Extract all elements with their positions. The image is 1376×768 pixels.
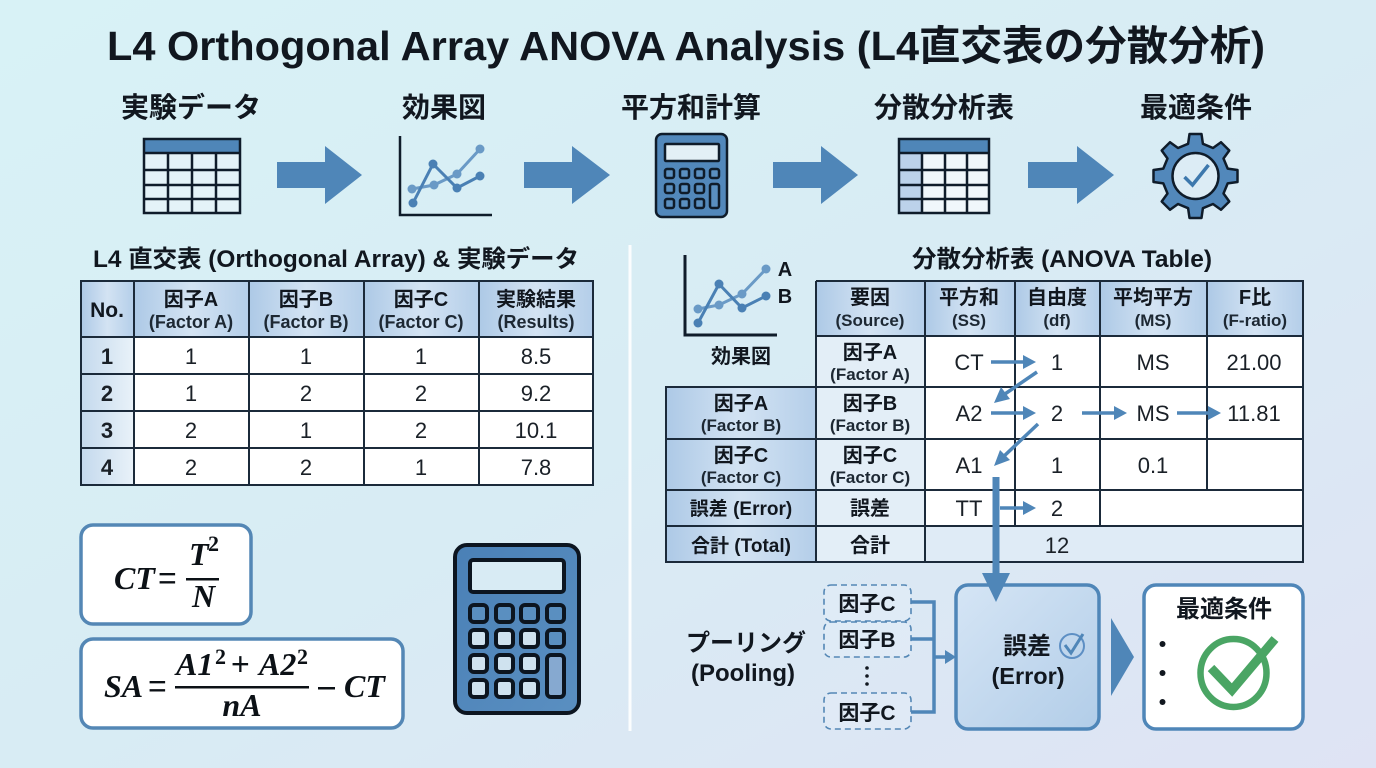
- table: orthogonal array and results: 2: [300, 381, 312, 406]
- pooled factor boxes: 因子C: [838, 702, 896, 725]
- panel: error box: 誤差: [1003, 633, 1051, 660]
- table: orthogonal array and results: 1: [101, 344, 113, 369]
- table: orthogonal array and results: 7.8: [521, 455, 551, 480]
- chart: effect plot with A and B lines: [685, 255, 792, 368]
- table: ANOVA: F比: [1239, 286, 1271, 309]
- table: orthogonal array and results: 2: [101, 381, 113, 406]
- chart: effect plot with A and B lines: 効果図: [711, 345, 771, 368]
- table: ANOVA: 因子C: [843, 445, 897, 467]
- icon: large calculator: [455, 545, 579, 713]
- icon: effect plot: [400, 136, 492, 215]
- table: orthogonal array and results: 因子C: [394, 289, 448, 311]
- table: ANOVA: 因子C: [714, 445, 768, 467]
- table: orthogonal array and results: 2: [415, 381, 427, 406]
- icon: calculator: [656, 134, 727, 217]
- chart: effect plot with A and B lines: A: [778, 259, 792, 281]
- formula: SA: +: [231, 646, 250, 682]
- table: ANOVA: 0.1: [1138, 453, 1168, 478]
- arrow: error to optimum: [1111, 618, 1134, 696]
- panel: optimum condition: 最適条件: [1176, 596, 1272, 623]
- table: ANOVA: 誤差: [850, 497, 890, 520]
- title: L4 Orthogonal Array ANOVA Analysis (L4直交表の分散分析): [107, 23, 1265, 69]
- table: ANOVA: 因子A: [714, 393, 768, 415]
- table: ANOVA: [666, 281, 1303, 562]
- table: ANOVA: (Factor C): [701, 468, 781, 487]
- table: orthogonal array and results: 実験結果: [496, 288, 576, 311]
- table: ANOVA: MS: [1136, 401, 1170, 426]
- table: ANOVA: TT: [956, 496, 982, 521]
- arrow: effect plot to sum of squares: [524, 146, 610, 204]
- table: orthogonal array and results: No.: [90, 299, 124, 322]
- formula: CT: 2: [208, 531, 219, 556]
- table: ANOVA: 平均平方: [1113, 286, 1193, 309]
- table: orthogonal array and results: (Results): [497, 312, 575, 332]
- table: orthogonal array and results: [81, 281, 593, 485]
- panel: optimum condition: [1144, 585, 1303, 729]
- table: ANOVA: (SS): [952, 311, 986, 330]
- table: ANOVA: A2: [956, 401, 982, 426]
- pooled factor boxes: 因子B: [838, 629, 896, 652]
- table: orthogonal array and results: 4: [101, 455, 114, 480]
- formula: CT: [81, 525, 251, 624]
- table: ANOVA: CT: [954, 350, 984, 375]
- table: orthogonal array and results: 2: [185, 455, 197, 480]
- table: ANOVA: 2: [1051, 401, 1063, 426]
- panel: error box: (Error): [991, 663, 1065, 689]
- table: orthogonal array and results: 1: [415, 344, 427, 369]
- formula: SA: =: [148, 668, 167, 704]
- chart: effect plot with A and B lines: B: [778, 286, 792, 308]
- table: orthogonal array and results: 因子B: [279, 289, 333, 311]
- icon: data table: [144, 139, 240, 213]
- process flow: [121, 91, 1252, 218]
- table: orthogonal array and results: 2: [300, 455, 312, 480]
- step label: effect plot: 効果図: [402, 92, 486, 123]
- table: ANOVA: (df): [1043, 311, 1071, 330]
- table: ANOVA: 21.00: [1226, 350, 1282, 375]
- step label: experiment data: 実験データ: [121, 91, 261, 123]
- table: orthogonal array and results: 3: [101, 418, 113, 443]
- label: pooling: (Pooling): [691, 660, 795, 687]
- arrow: ANOVA table to optimum: [1028, 146, 1114, 204]
- table: ANOVA: MS: [1136, 350, 1170, 375]
- table: ANOVA: (Factor A): [830, 365, 910, 384]
- arrow: sum of squares to ANOVA table: [773, 146, 858, 204]
- table: ANOVA: (Source): [836, 311, 904, 330]
- table: orthogonal array and results: (Factor A): [149, 312, 233, 332]
- table: ANOVA: 誤差 (Error): [690, 498, 792, 520]
- formula: SA: A2: [257, 646, 296, 682]
- table: ANOVA: 合計: [850, 534, 890, 557]
- formula: SA: SA: [104, 668, 143, 704]
- table: orthogonal array and results: 1: [300, 344, 312, 369]
- formula: SA: nA: [222, 687, 262, 723]
- formula: CT: T: [189, 536, 210, 572]
- icon: gear with check: [1154, 134, 1238, 218]
- connector: factors to error: [911, 602, 956, 712]
- table: orthogonal array and results: 2: [415, 418, 427, 443]
- table: ANOVA: 因子B: [843, 393, 897, 415]
- label: pooling: [686, 629, 806, 687]
- table: ANOVA: 自由度: [1027, 286, 1087, 309]
- table: orthogonal array and results: 8.5: [521, 344, 551, 369]
- formula: SA: 2: [215, 644, 226, 669]
- table: ANOVA: 1: [1051, 453, 1063, 478]
- table: orthogonal array and results: (Factor B): [264, 312, 349, 332]
- formula: SA: [81, 639, 403, 728]
- table: orthogonal array and results: 1: [300, 418, 312, 443]
- formula: SA: CT: [344, 668, 386, 704]
- table: ANOVA: 平方和: [939, 286, 999, 309]
- arrow: data to effect plot: [277, 146, 362, 204]
- table: orthogonal array and results: 1: [185, 344, 197, 369]
- table: ANOVA: 12: [1045, 533, 1069, 558]
- icon: ANOVA table: [899, 139, 989, 213]
- table: ANOVA: 要因: [850, 286, 890, 309]
- table: ANOVA: 11.81: [1227, 401, 1281, 426]
- heading: ANOVA table: 分散分析表 (ANOVA Table): [912, 246, 1212, 273]
- table: orthogonal array and results: 9.2: [521, 381, 551, 406]
- table: ANOVA: (MS): [1135, 311, 1171, 330]
- step label: optimum condition: 最適条件: [1140, 92, 1252, 123]
- table: orthogonal array and results: 1: [415, 455, 427, 480]
- table: ANOVA: (F-ratio): [1223, 311, 1287, 330]
- step label: sum of squares: 平方和計算: [621, 92, 761, 123]
- formula: CT: =: [158, 560, 177, 596]
- table: orthogonal array and results: 2: [185, 418, 197, 443]
- icon: green check: [1200, 639, 1275, 707]
- table: ANOVA: 合計 (Total): [691, 534, 791, 557]
- formula: CT: CT: [114, 560, 156, 596]
- formula: SA: 2: [297, 644, 308, 669]
- formula: SA: A1: [174, 646, 213, 682]
- table: ANOVA: (Factor B): [830, 416, 910, 435]
- table: orthogonal array and results: 因子A: [164, 289, 218, 311]
- arrows: calculation flow inside table: [991, 355, 1221, 515]
- table: ANOVA: (Factor B): [701, 416, 781, 435]
- panel: error box: [956, 585, 1099, 729]
- table: orthogonal array and results: 10.1: [515, 418, 557, 443]
- table: ANOVA: 1: [1051, 350, 1063, 375]
- heading: orthogonal array: L4 直交表 (Orthogonal Array) & 実験データ: [93, 245, 579, 273]
- table: ANOVA: 2: [1051, 496, 1063, 521]
- table: orthogonal array and results: (Factor C): [378, 312, 464, 332]
- label: pooling: プーリング: [686, 629, 806, 657]
- pooled factor boxes: 因子C: [838, 593, 896, 616]
- formula: CT: N: [191, 578, 217, 614]
- table: orthogonal array and results: 1: [185, 381, 197, 406]
- table: ANOVA: 因子A: [843, 342, 897, 364]
- table: ANOVA: A1: [956, 453, 982, 478]
- arrow: down to error box: [982, 477, 1010, 602]
- step label: ANOVA table: 分散分析表: [874, 92, 1014, 123]
- pooled factor boxes: [824, 585, 911, 729]
- table: ANOVA: (Factor C): [830, 468, 910, 487]
